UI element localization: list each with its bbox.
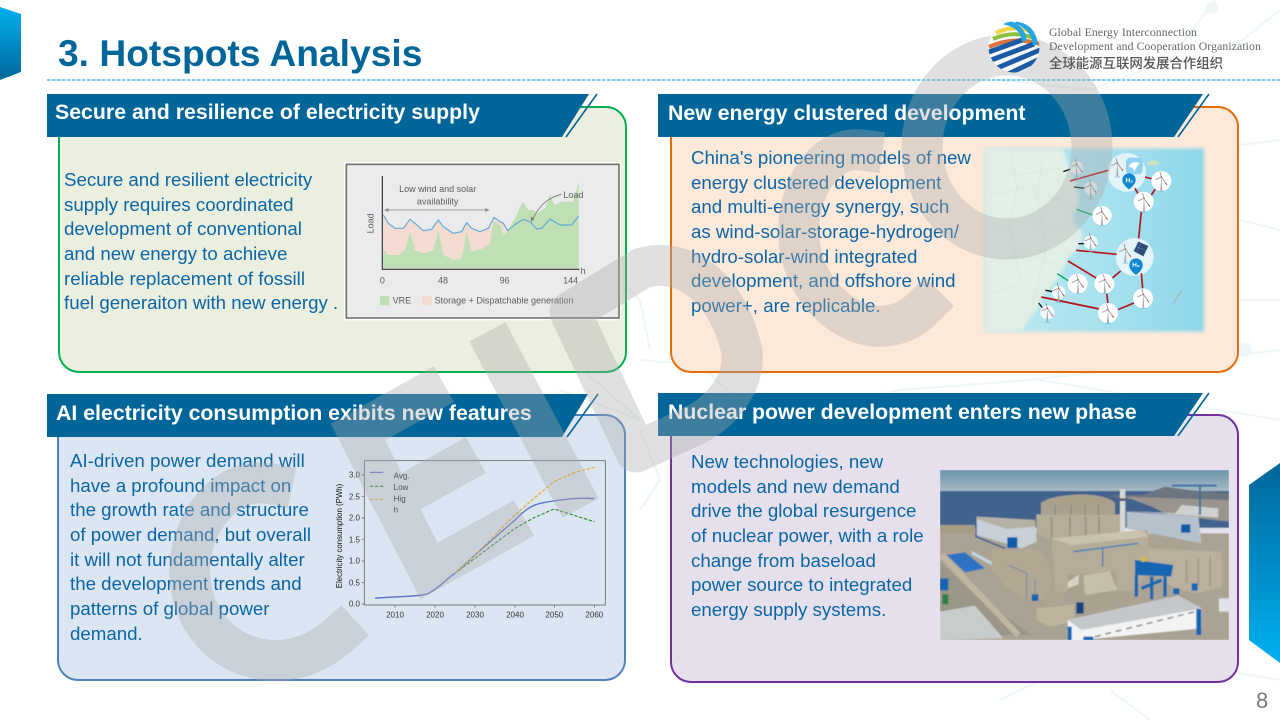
body text: development of conventional <box>64 218 302 239</box>
body text <box>691 451 924 620</box>
line chart: electricity consumption: h <box>394 506 398 515</box>
panel heading: Secure and resilience of electricity supply <box>55 100 480 124</box>
page number: 8 <box>1256 688 1268 713</box>
header banner <box>658 94 1210 138</box>
line chart: electricity consumption: 2060 <box>585 611 604 620</box>
chart: load vs VRE: 0 <box>380 275 385 285</box>
line chart: electricity consumption: 2.5 <box>349 492 361 501</box>
chart: load vs VRE: Storage + Dispatchable generation <box>435 296 574 306</box>
body text <box>70 450 311 644</box>
organization name: Chinese: 全球能源互联网发展合作组织 <box>1049 56 1223 70</box>
body text: have a profound impact on <box>70 475 291 496</box>
panel background <box>670 414 1239 683</box>
panel: new energy clustered development <box>658 94 1239 373</box>
body text: demand. <box>70 623 143 644</box>
body text: hydro-solar-wind integrated <box>691 246 917 267</box>
panel: secure and resilient supply <box>47 94 627 373</box>
map: offshore wind clusters <box>982 146 1206 334</box>
body text <box>691 147 971 316</box>
body text: New technologies, new <box>691 451 883 472</box>
line chart: electricity consumption: 1.0 <box>349 557 361 566</box>
body text: models and new demand <box>691 476 900 497</box>
line chart: electricity consumption: 2050 <box>545 611 564 620</box>
body text: of power demand, but overall <box>70 524 311 545</box>
map: offshore wind clusters: H₂ <box>1132 262 1140 269</box>
body text: reliable replacement of fossill <box>64 268 305 289</box>
panel: AI electricity consumption <box>47 394 626 681</box>
chart: load vs VRE: Load <box>563 190 583 200</box>
body text: and new energy to achieve <box>64 243 287 264</box>
icon: striped globe <box>988 22 1040 72</box>
panel heading: AI electricity consumption exibits new features <box>56 401 532 425</box>
body text: the growth rate and structure <box>70 499 309 520</box>
map: offshore wind clusters: H₂ <box>1125 177 1133 184</box>
line chart: electricity consumption: Avg. <box>394 471 410 480</box>
line chart: electricity consumption <box>335 460 606 620</box>
line chart: electricity consumption: 3.0 <box>349 471 361 480</box>
line chart: electricity consumption: 2010 <box>386 611 404 620</box>
line chart: electricity consumption: 2030 <box>466 611 484 620</box>
header dashed rule <box>47 79 1280 81</box>
organization name: English: Development and Cooperation Organization <box>1049 40 1261 53</box>
photo: nuclear power plant <box>940 470 1229 640</box>
chart: load vs VRE: h <box>581 266 586 276</box>
panel background <box>670 106 1239 373</box>
line chart: electricity consumption: Hig <box>394 494 406 503</box>
body text: fuel generaiton with new energy . <box>64 292 338 313</box>
chart: load vs VRE: 144 <box>563 275 578 285</box>
organization name: English <box>1049 26 1261 53</box>
logo: organization <box>988 22 1261 72</box>
corner tab: bottom right <box>1249 463 1280 663</box>
line chart: electricity consumption: Low <box>394 483 409 492</box>
body text: power+, are replicable. <box>691 295 881 316</box>
header banner <box>658 392 1210 436</box>
header banner <box>47 394 599 438</box>
panel: nuclear power development <box>658 392 1239 683</box>
body text: the development trends and <box>70 573 302 594</box>
organization name: English: Global Energy Interconnection <box>1049 26 1197 39</box>
line chart: electricity consumption: 0.5 <box>349 578 361 587</box>
chart: load vs VRE: availability <box>417 197 459 207</box>
body text: and multi-energy synergy, such <box>691 196 949 217</box>
chart: load vs VRE <box>344 162 621 320</box>
title: 3. Hotspots Analysis <box>58 32 422 74</box>
line chart: electricity consumption: 2.0 <box>349 514 361 523</box>
line chart: electricity consumption: Electricity consumption (PWh) <box>335 483 344 588</box>
body text: of nuclear power, with a role <box>691 525 924 546</box>
body text: Secure and resilient electricity <box>64 169 312 190</box>
body text: AI-driven power demand will <box>70 450 305 471</box>
body text <box>64 169 338 313</box>
body text: energy supply systems. <box>691 599 886 620</box>
line chart: electricity consumption: 2040 <box>506 611 524 620</box>
chart: load vs VRE: 48 <box>438 275 448 285</box>
body text: supply requires coordinated <box>64 194 294 215</box>
body text: it will not fundamentally alter <box>70 549 305 570</box>
chart: load vs VRE: 96 <box>500 275 510 285</box>
chart: load vs VRE: Load <box>365 213 375 233</box>
panel heading: Nuclear power development enters new phase <box>668 400 1137 424</box>
line chart: electricity consumption: 0.0 <box>349 600 361 609</box>
body text: drive the global resurgence <box>691 500 916 521</box>
panel heading: New energy clustered development <box>668 101 1025 125</box>
body text: change from baseload <box>691 550 876 571</box>
line chart: electricity consumption: 2020 <box>426 611 444 620</box>
body text: China's pioneering models of new <box>691 147 971 168</box>
body text: development, and offshore wind <box>691 270 956 291</box>
corner tab: top left <box>0 7 21 80</box>
line chart: electricity consumption: 1.5 <box>349 535 361 544</box>
body text: as wind-solar-storage-hydrogen/ <box>691 221 959 242</box>
chart: load vs VRE: VRE <box>393 296 411 306</box>
body text: power source to integrated <box>691 574 912 595</box>
body text: energy clustered development <box>691 172 941 193</box>
body text: patterns of global power <box>70 598 269 619</box>
chart: load vs VRE: Low wind and solar <box>399 184 476 194</box>
panel background <box>57 414 626 681</box>
panel background <box>58 106 627 373</box>
header banner <box>47 94 598 138</box>
